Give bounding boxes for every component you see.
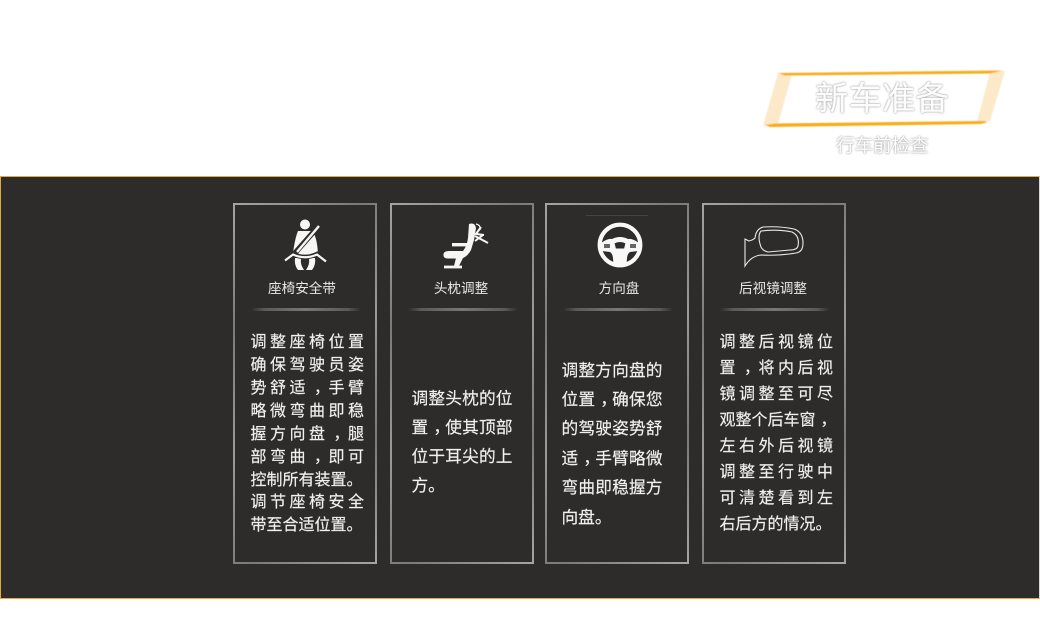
divider xyxy=(408,308,518,311)
icon: steering wheel xyxy=(586,215,648,268)
text: steering wheel: 适 ，手臂略微 xyxy=(562,449,663,468)
text: mirror: 右后方的情况。 xyxy=(720,516,832,533)
text: mirror: 调整后视镜位 xyxy=(720,334,833,351)
text: mirror: 调整至行驶中 xyxy=(720,464,833,481)
text: headrest: 方。 xyxy=(412,476,445,495)
title: seat belt: 座椅安全带 xyxy=(268,281,336,296)
text: mirror: 可清楚看到左 xyxy=(720,490,833,507)
text: seat belt: 握方向盘 ，腿 xyxy=(250,426,364,443)
divider xyxy=(251,308,361,311)
text: steering wheel xyxy=(562,361,663,527)
title: mirror: 后视镜调整 xyxy=(739,281,807,296)
text: headrest xyxy=(412,389,513,495)
divider xyxy=(720,308,830,311)
text: mirror: 镜调整至可尽 xyxy=(720,386,833,403)
text: seat belt: 确保驾驶员姿 xyxy=(250,357,364,374)
text: mirror: 置 ，将内后视 xyxy=(720,360,833,377)
card frame xyxy=(702,203,846,564)
panel: mirror xyxy=(702,203,846,564)
text: seat belt: 控制所有装置。 xyxy=(250,472,363,489)
title: headrest: 头枕调整 xyxy=(434,281,488,296)
panel: seat belt xyxy=(233,203,377,564)
text: mirror xyxy=(720,333,837,533)
right pale band xyxy=(977,71,1005,122)
icon: seat belt xyxy=(284,220,327,270)
text: headrest: 调整头枕的位 xyxy=(412,389,512,408)
text: mirror: 左右外后视镜 xyxy=(720,438,833,455)
text: seat belt: 调整座椅位置 xyxy=(250,334,364,351)
title: steering wheel: 方向盘 xyxy=(599,281,639,296)
dark panel xyxy=(0,176,1040,599)
text: steering wheel: 的驾驶姿势舒 xyxy=(562,419,662,438)
divider xyxy=(563,308,673,311)
icon: headrest seat xyxy=(443,223,488,268)
subtitle: 行车前检查 xyxy=(836,135,929,156)
text: seat belt xyxy=(250,333,364,534)
text: seat belt: 调节座椅安全 xyxy=(250,494,364,511)
panel: steering wheel xyxy=(545,203,689,564)
card frame xyxy=(545,203,689,564)
text: seat belt: 部弯曲 ，即可 xyxy=(250,449,364,466)
text: steering wheel: 弯曲即稳握方 xyxy=(562,478,662,497)
left pale band xyxy=(763,73,792,126)
text: seat belt: 势舒适 ，手臂 xyxy=(250,380,364,397)
text: steering wheel: 调整方向盘的 xyxy=(562,361,662,380)
text: steering wheel: 位置 ，确保您 xyxy=(562,390,663,409)
top orange line xyxy=(778,70,1003,76)
card frame xyxy=(390,203,534,564)
text: seat belt: 带至合适位置。 xyxy=(250,517,363,534)
card frame xyxy=(233,203,377,564)
title: 新车准备 xyxy=(815,81,949,118)
text: mirror: 观整个后车窗 ， xyxy=(720,412,837,429)
panel: headrest xyxy=(390,203,534,564)
bottom orange line xyxy=(765,121,987,127)
text: headrest: 置 ，使其顶部 xyxy=(412,418,513,437)
icon: side mirror xyxy=(744,226,804,268)
text: steering wheel: 向盘。 xyxy=(562,508,612,527)
text: headrest: 位于耳尖的上 xyxy=(412,447,512,466)
heading badge xyxy=(762,70,1006,128)
text: seat belt: 略微弯曲即稳 xyxy=(250,403,364,420)
